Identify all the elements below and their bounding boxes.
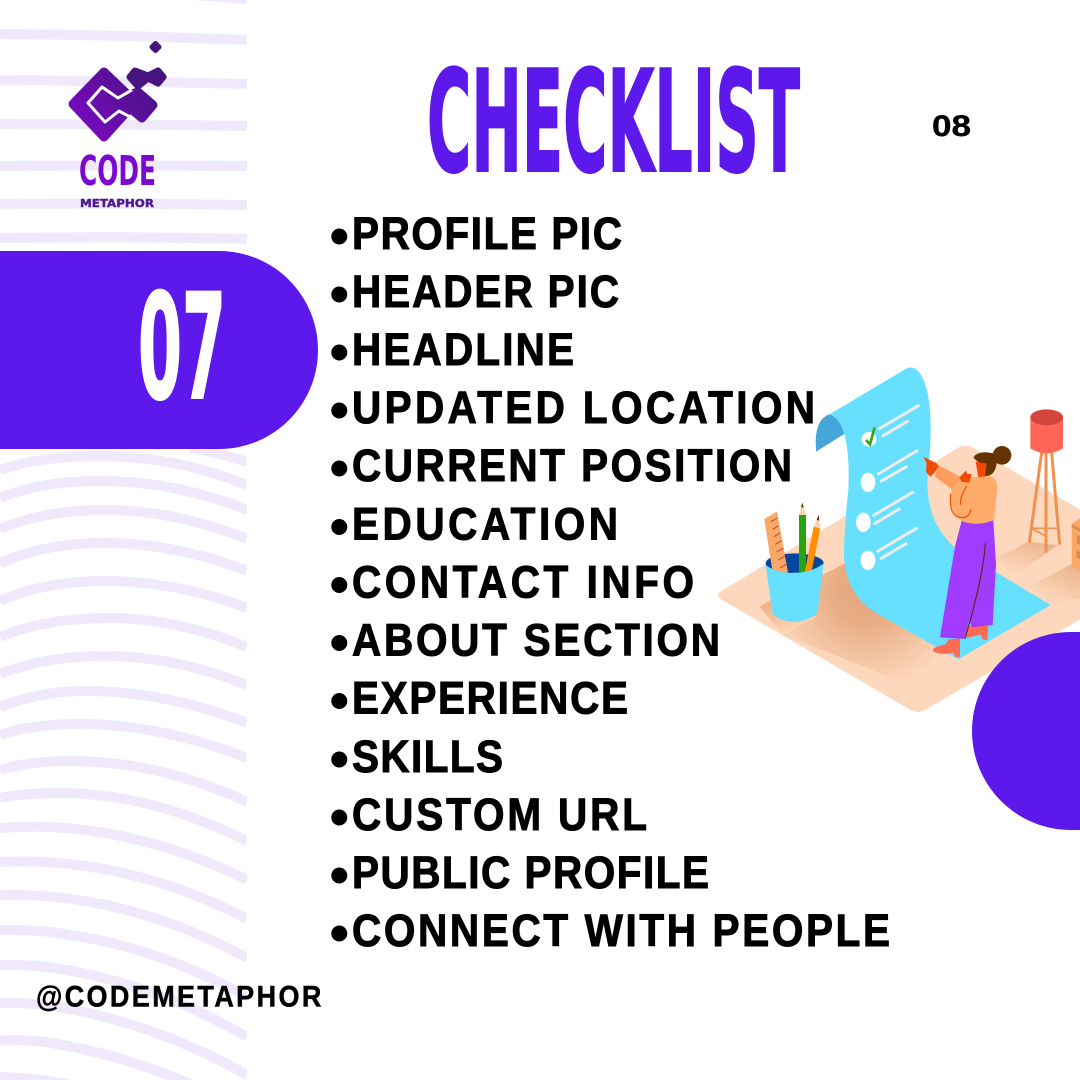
background pattern: wavy lavender lines xyxy=(0,0,247,1080)
pencil cup xyxy=(764,503,824,622)
logo word CODE: CODE xyxy=(79,147,156,195)
isometric floor xyxy=(718,446,1080,712)
floor lamp xyxy=(1029,409,1063,553)
side box xyxy=(1072,518,1080,572)
checklist items: CONNECT WITH PEOPLE xyxy=(352,906,890,957)
checklist items xyxy=(330,204,890,964)
checklist items: SKILLS xyxy=(352,732,503,783)
handle: @CODEMETAPHOR xyxy=(36,980,322,1014)
logo: Code Metaphor xyxy=(73,40,163,210)
illustration: woman with checklist xyxy=(718,367,1080,712)
checklist items: • xyxy=(330,901,349,964)
checklist items: HEADLINE xyxy=(352,325,574,376)
purple number band xyxy=(0,251,318,449)
checklist items: • xyxy=(330,494,349,558)
checklist items: HEADER PIC xyxy=(352,267,619,318)
checklist items: EDUCATION xyxy=(352,500,618,550)
checklist items: CONTACT INFO xyxy=(352,558,694,608)
checklist items: • xyxy=(330,843,349,906)
checklist items: UPDATED LOCATION xyxy=(352,383,815,434)
checklist items: • xyxy=(330,785,349,848)
checklist items: • xyxy=(330,436,349,499)
checklist items: • xyxy=(330,320,349,383)
logo word METAPHOR: METAPHOR xyxy=(80,197,155,210)
checklist items: • xyxy=(330,378,349,441)
woman xyxy=(923,446,1011,657)
checklist items: • xyxy=(330,262,349,325)
infographic canvas: 07 xyxy=(138,263,226,433)
checklist items: ABOUT SECTION xyxy=(352,616,720,666)
purple corner shape xyxy=(972,632,1080,830)
checklist items: • xyxy=(330,204,349,267)
page number 08: 08 xyxy=(932,110,971,143)
checklist items: • xyxy=(330,552,349,616)
checklist items: PROFILE PIC xyxy=(352,209,622,260)
checklist items: EXPERIENCE xyxy=(352,674,628,724)
checklist items: • xyxy=(330,727,349,790)
floor shadows xyxy=(759,542,1080,686)
checklist items: CUSTOM URL xyxy=(352,790,647,841)
paper scroll xyxy=(816,367,1051,659)
checklist items: • xyxy=(330,610,349,674)
logo mark xyxy=(73,40,163,137)
checklist items: CURRENT POSITION xyxy=(352,441,792,492)
checklist items: PUBLIC PROFILE xyxy=(352,848,709,899)
checklist items: • xyxy=(330,668,349,732)
